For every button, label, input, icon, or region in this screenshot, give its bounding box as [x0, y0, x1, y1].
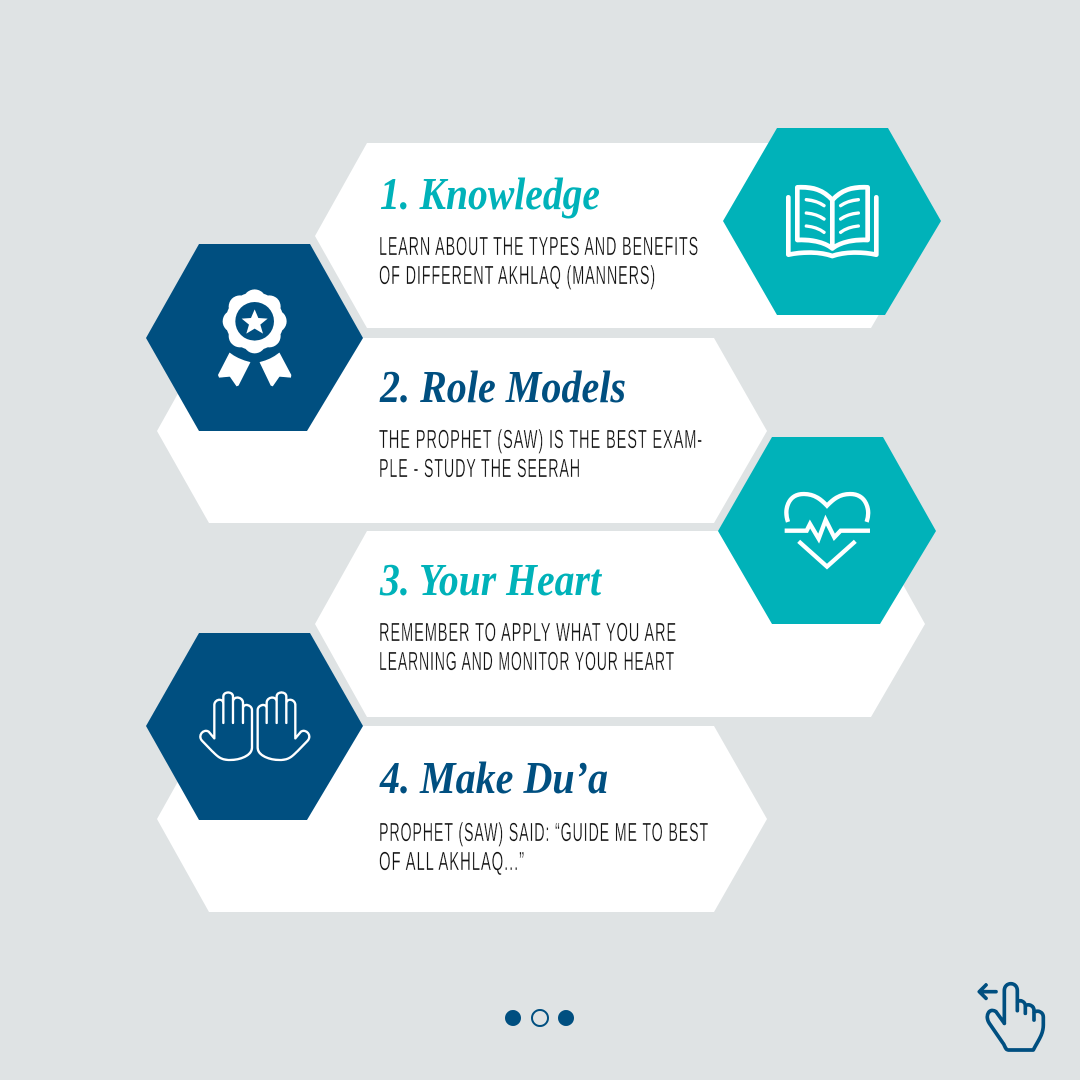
pagination dots — [505, 1010, 574, 1026]
icon: swipe hand — [979, 984, 1043, 1050]
panel: 4 make dua — [157, 726, 767, 912]
hexagon: navy award — [146, 244, 363, 431]
title: 1. Knowledge: 1. Knowledge — [380, 168, 600, 219]
hexagon: teal book — [723, 128, 941, 315]
title: 3. Your Heart: 3. Your Heart — [379, 554, 602, 605]
text: knowledge description — [379, 231, 699, 290]
title: 4. Make Du'a: 4. Make Du’a — [379, 752, 608, 803]
text: make dua description — [379, 817, 709, 876]
text: make dua description: PROPHET (SAW) SAID: “GUIDE ME TO BEST — [379, 817, 709, 847]
icon: open book — [788, 187, 876, 256]
title: 2. Role Models: 2. Role Models — [379, 361, 626, 412]
panel: 1 knowledge — [315, 143, 925, 328]
text: your heart description: LEARNING AND MONITOR YOUR HEART — [379, 646, 675, 676]
hexagon: navy hands — [146, 633, 363, 820]
panel: 3 your heart — [315, 531, 925, 717]
text: role models description: THE PROPHET (SAW) IS THE BEST EXAM- — [379, 424, 703, 454]
icon: award rosette — [218, 289, 291, 386]
panel: 2 role models — [157, 338, 767, 523]
icon: heart with pulse — [785, 494, 870, 567]
text: knowledge description: LEARN ABOUT THE TYPES AND BENEFITS — [379, 231, 699, 261]
hexagon: teal heart — [718, 437, 936, 624]
text: make dua description: OF ALL AKHLAQ...” — [379, 846, 525, 876]
text: your heart description — [379, 617, 677, 676]
text: role models description: PLE - STUDY THE SEERAH — [379, 453, 581, 483]
text: knowledge description: OF DIFFERENT AKHLAQ (MANNERS) — [379, 260, 656, 290]
text: role models description — [379, 424, 703, 483]
icon: raised hands — [200, 692, 309, 760]
text: your heart description: REMEMBER TO APPLY WHAT YOU ARE — [379, 617, 677, 647]
